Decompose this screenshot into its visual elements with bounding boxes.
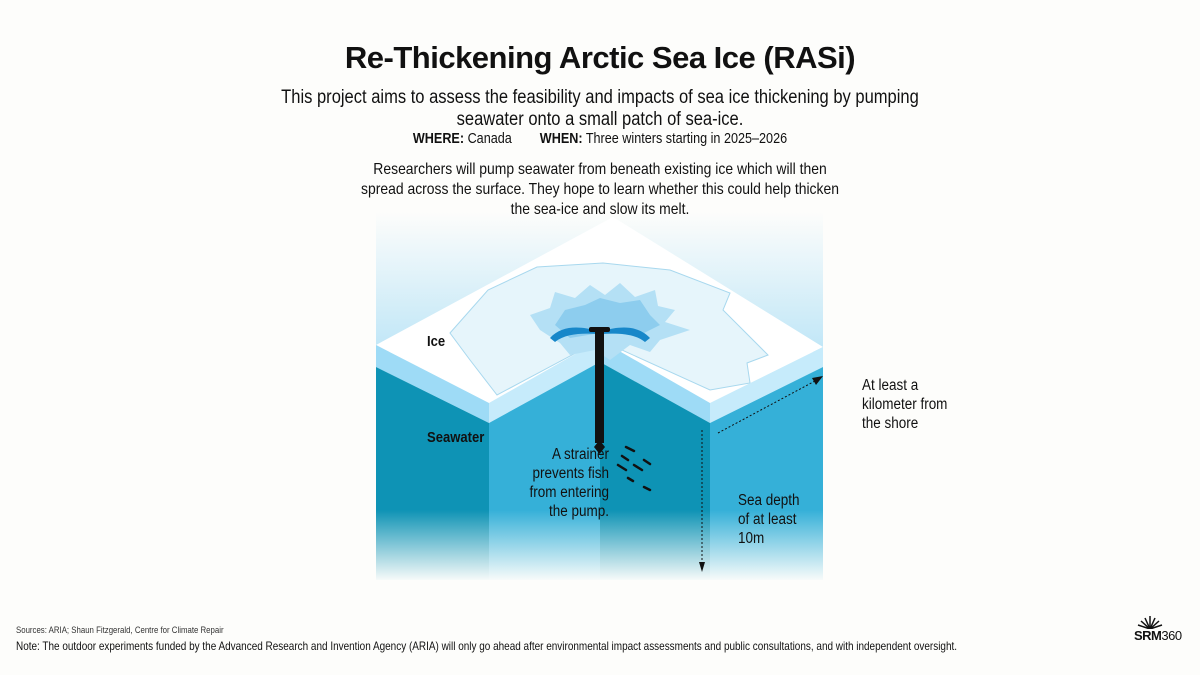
label: strainer [530,446,609,520]
pump [589,327,610,454]
label: seawater: Seawater [427,429,484,446]
description: the sea-ice and slow its melt. [511,201,689,218]
ice top surface [376,217,823,403]
subtitle: This project aims to assess the feasibility and impacts of sea ice thickening by pumping [281,87,919,108]
label: sea depth: Sea depth [738,492,799,509]
note: Note: The outdoor experiments funded by the Advanced Research and Invention Agency (ARIA) will only go ahead after environmental impact assessments and public consultations, and with independent oversight. [16,639,957,653]
logo: SRM360 [1134,616,1182,643]
logo: SRM360: SRM360 [1134,628,1182,643]
label: distance [862,377,947,432]
ice side bands [376,340,823,423]
water spread [530,283,690,360]
label: distance: the shore [862,415,918,432]
fish [618,447,650,490]
label: sea depth: 10m [738,530,764,547]
label: sea depth [738,492,799,547]
label: strainer: A strainer [552,446,609,463]
description: Researchers will pump seawater from beneath existing ice which will then [373,161,827,178]
arrow: distance [718,376,823,433]
subtitle: seawater onto a small patch of sea-ice. [457,109,743,130]
title: Re-Thickening Arctic Sea Ice (RASi) [345,40,855,75]
where / when: WHERE: Canada WHEN: Three winters starting in 2025–2026 [413,131,787,147]
label: strainer: prevents fish [533,465,609,482]
label: strainer: from entering [530,484,609,501]
label: ice: Ice [427,333,445,350]
description: spread across the surface. They hope to learn whether this could help thicken [361,181,839,198]
label: sea depth: of at least [738,511,796,528]
description [361,161,839,218]
background glow [376,212,823,352]
seawater faces [370,362,830,582]
label: distance: At least a [862,377,918,394]
label: strainer: the pump. [549,503,609,520]
arrow: depth [699,430,705,572]
label: distance: kilometer from [862,396,947,413]
sources: Sources: ARIA; Shaun Fitzgerald, Centre for Climate Repair [16,625,224,635]
subtitle [281,87,919,130]
